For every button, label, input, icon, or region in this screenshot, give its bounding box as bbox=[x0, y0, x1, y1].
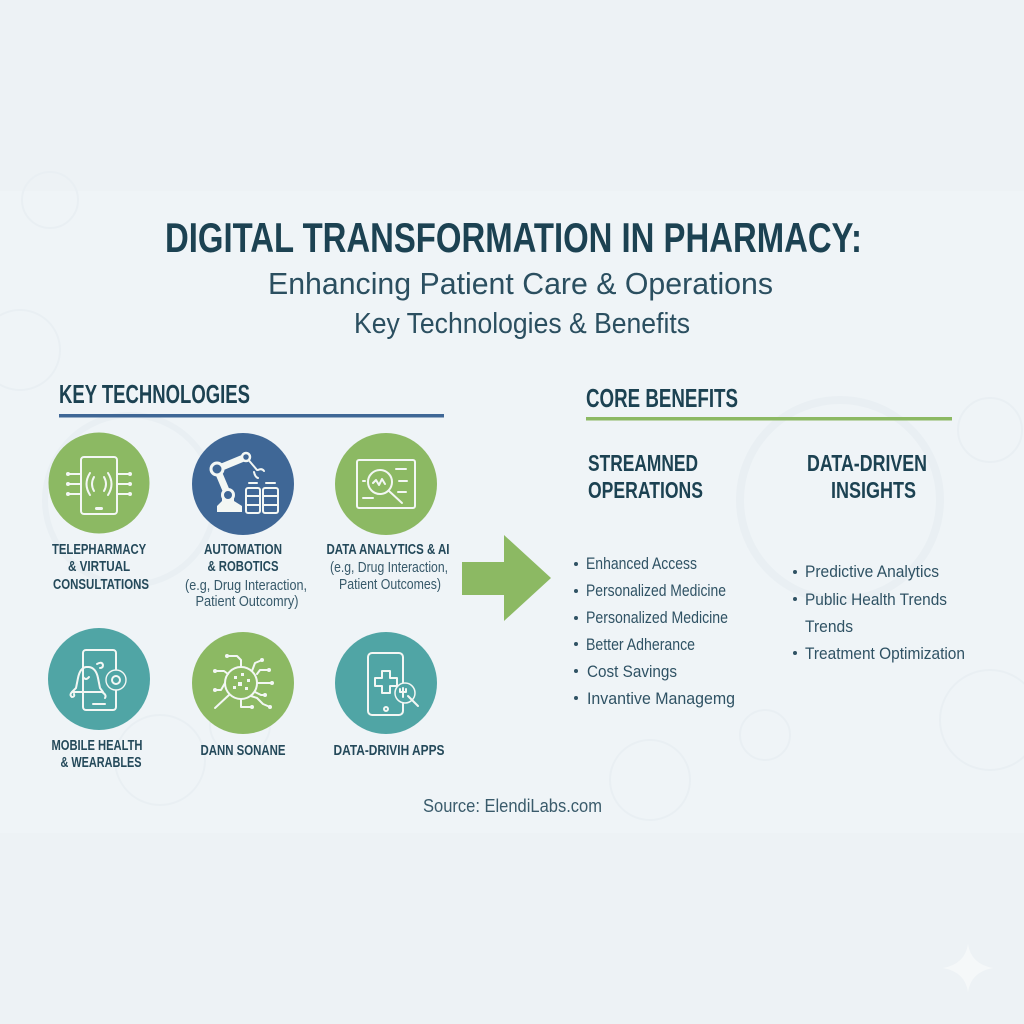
heading: key technologies: KEY TECHNOLOGIES bbox=[59, 379, 250, 409]
source: Source: ElendiLabs.com bbox=[423, 796, 602, 816]
icon: data science bbox=[192, 632, 294, 734]
icon: automation and robotics bbox=[192, 433, 294, 535]
column heading: streamlined operations: STREAMNED bbox=[588, 450, 698, 476]
list: data-driven insights: Public Health Trends bbox=[805, 590, 947, 609]
heading: key technologies bbox=[59, 379, 444, 418]
icon: mobile health and wearables bbox=[48, 628, 150, 730]
column heading: data-driven insights: INSIGHTS bbox=[831, 477, 916, 503]
label: telepharmacy: TELEPHARMACY bbox=[52, 542, 146, 558]
label: data analytics and AI bbox=[326, 542, 450, 593]
list: data-driven insights: Trends bbox=[805, 617, 853, 636]
heading: core benefits: CORE BENEFITS bbox=[586, 383, 738, 413]
label: automation and robotics: AUTOMATION bbox=[204, 542, 282, 558]
icon: telepharmacy bbox=[48, 432, 150, 534]
subtitle: Enhancing Patient Care & Operations bbox=[268, 266, 773, 301]
label: data-driven apps: DATA-DRIVIH APPS bbox=[334, 743, 445, 759]
label: telepharmacy: CONSULTATIONS bbox=[53, 577, 149, 593]
list: streamlined operations bbox=[574, 554, 735, 708]
list: streamlined operations: Enhanced Access bbox=[586, 554, 697, 573]
list: data-driven insights bbox=[793, 562, 965, 663]
list: data-driven insights: Treatment Optimization bbox=[805, 644, 965, 663]
arrow bbox=[462, 535, 551, 621]
label: automation and robotics bbox=[185, 542, 307, 610]
list: streamlined operations: Cost Savings bbox=[587, 662, 677, 681]
list: streamlined operations: Personalized Medicine bbox=[586, 608, 728, 627]
column heading: streamlined operations: OPERATIONS bbox=[588, 477, 703, 503]
label: data science: DANN SONANE bbox=[200, 743, 286, 759]
central light band bbox=[0, 191, 1024, 833]
label: mobile health and wearables: & WEARABLES bbox=[60, 755, 142, 771]
label: automation and robotics: (e.g, Drug Interaction, bbox=[185, 578, 307, 594]
icon: data-driven apps bbox=[335, 632, 437, 734]
label: data analytics and AI: Patient Outcomes) bbox=[339, 577, 441, 593]
list: streamlined operations: Better Adherance bbox=[586, 635, 695, 654]
label: telepharmacy: & VIRTUAL bbox=[68, 559, 130, 575]
label: automation and robotics: & ROBOTICS bbox=[208, 559, 279, 575]
label: data analytics and AI: DATA ANALYTICS & AI bbox=[326, 542, 450, 558]
label: mobile health and wearables: MOBILE HEALTH bbox=[51, 738, 142, 754]
list: data-driven insights: Predictive Analytics bbox=[805, 562, 939, 581]
list: streamlined operations: Personalized Medicine bbox=[586, 581, 726, 600]
icon: sparkle bbox=[943, 944, 993, 992]
label: data analytics and AI: (e.g, Drug Interaction, bbox=[330, 560, 448, 576]
subtitle line 2: Key Technologies & Benefits bbox=[354, 308, 690, 340]
icon: data analytics and AI bbox=[335, 433, 437, 535]
list: streamlined operations: Invantive Managemg bbox=[587, 689, 735, 708]
column heading: data-driven insights: DATA-DRIVEN bbox=[807, 450, 927, 476]
heading: core benefits bbox=[586, 383, 952, 420]
label: automation and robotics: Patient Outcomry) bbox=[196, 594, 298, 610]
